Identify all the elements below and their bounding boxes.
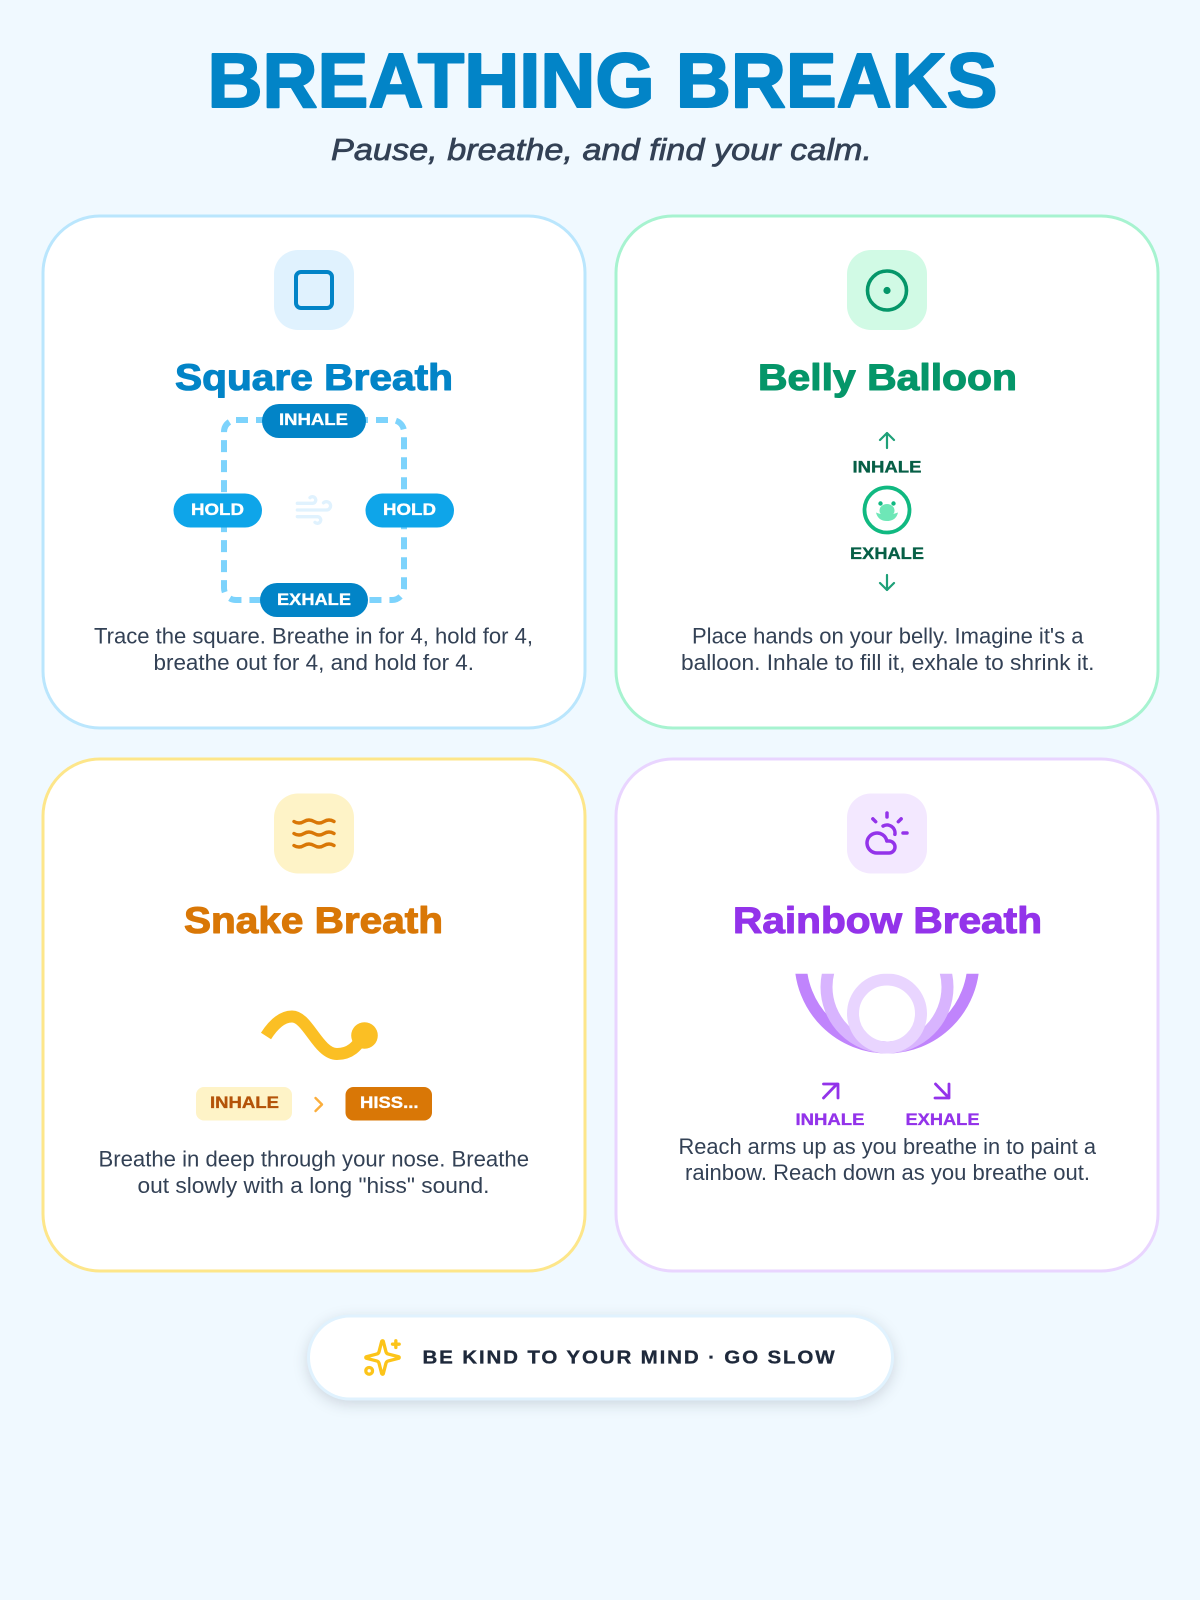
panel: square breath xyxy=(43,216,585,728)
icon: wind xyxy=(297,497,331,523)
description: out slowly with a long "hiss" sound. xyxy=(138,1173,490,1198)
label: inhale: INHALE xyxy=(279,410,348,429)
panel: belly balloon xyxy=(616,216,1158,728)
icon: target circle xyxy=(847,250,927,330)
label: inhale: INHALE xyxy=(852,457,922,476)
arrow: up xyxy=(880,433,894,448)
label: hold right: HOLD xyxy=(383,500,436,519)
icon: square xyxy=(274,250,354,330)
label: exhale: EXHALE xyxy=(906,1110,980,1129)
description xyxy=(678,1134,1097,1185)
heading: snake breath: Snake Breath xyxy=(184,900,443,941)
description xyxy=(98,1146,529,1198)
description: Place hands on your belly. Imagine it's a xyxy=(692,624,1084,648)
description: rainbow. Reach down as you breathe out. xyxy=(685,1160,1090,1185)
arrow: up right xyxy=(824,1084,838,1098)
label: hold left: HOLD xyxy=(191,500,244,519)
label: hiss xyxy=(346,1087,432,1120)
arrow: down right xyxy=(935,1084,949,1098)
arrow: down xyxy=(880,575,894,590)
label: inhale: INHALE xyxy=(210,1093,279,1112)
footer text: BE KIND TO YOUR MIND · GO SLOW xyxy=(422,1347,836,1367)
icon: cloud and sun xyxy=(847,794,927,874)
description: balloon. Inhale to fill it, exhale to shrink it. xyxy=(681,650,1094,675)
description xyxy=(94,624,533,675)
label: exhale: EXHALE xyxy=(277,590,351,609)
illustration: rainbow xyxy=(795,974,979,1054)
panel: rainbow breath xyxy=(616,759,1158,1271)
icon: waves xyxy=(274,794,354,874)
label: inhale: INHALE xyxy=(796,1110,864,1129)
panel: snake breath xyxy=(43,759,585,1271)
label: hold left xyxy=(174,494,262,528)
heading: square breath: Square Breath xyxy=(175,357,453,398)
footer banner xyxy=(308,1316,892,1399)
illustration: snake xyxy=(266,1016,378,1054)
arrow: chevron xyxy=(316,1098,322,1111)
label: exhale xyxy=(260,583,368,617)
description: breathe out for 4, and hold for 4. xyxy=(154,650,474,675)
description: Reach arms up as you breathe in to paint a xyxy=(678,1134,1097,1159)
arrows and labels xyxy=(796,1084,980,1129)
subtitle: Pause, breathe, and find your calm. xyxy=(331,132,872,167)
label: inhale xyxy=(262,404,366,438)
description: Trace the square. Breathe in for 4, hold for 4, xyxy=(94,624,533,648)
diagram: breathing square xyxy=(174,404,454,617)
label: hold right xyxy=(366,494,454,528)
heading: belly balloon: Belly Balloon xyxy=(758,357,1017,398)
icon: sparkles xyxy=(366,1341,399,1374)
heading: rainbow breath: Rainbow Breath xyxy=(733,900,1042,941)
description: Breathe in deep through your nose. Breathe xyxy=(98,1146,529,1172)
label: inhale xyxy=(196,1087,292,1120)
description xyxy=(681,624,1094,675)
title: BREATHING BREAKS xyxy=(208,38,998,124)
label: hiss: HISS... xyxy=(360,1093,418,1112)
diagram: belly breathing xyxy=(850,433,924,590)
balloon face xyxy=(864,488,910,532)
flow: inhale to hiss xyxy=(196,1087,432,1120)
label: exhale: EXHALE xyxy=(850,544,924,563)
